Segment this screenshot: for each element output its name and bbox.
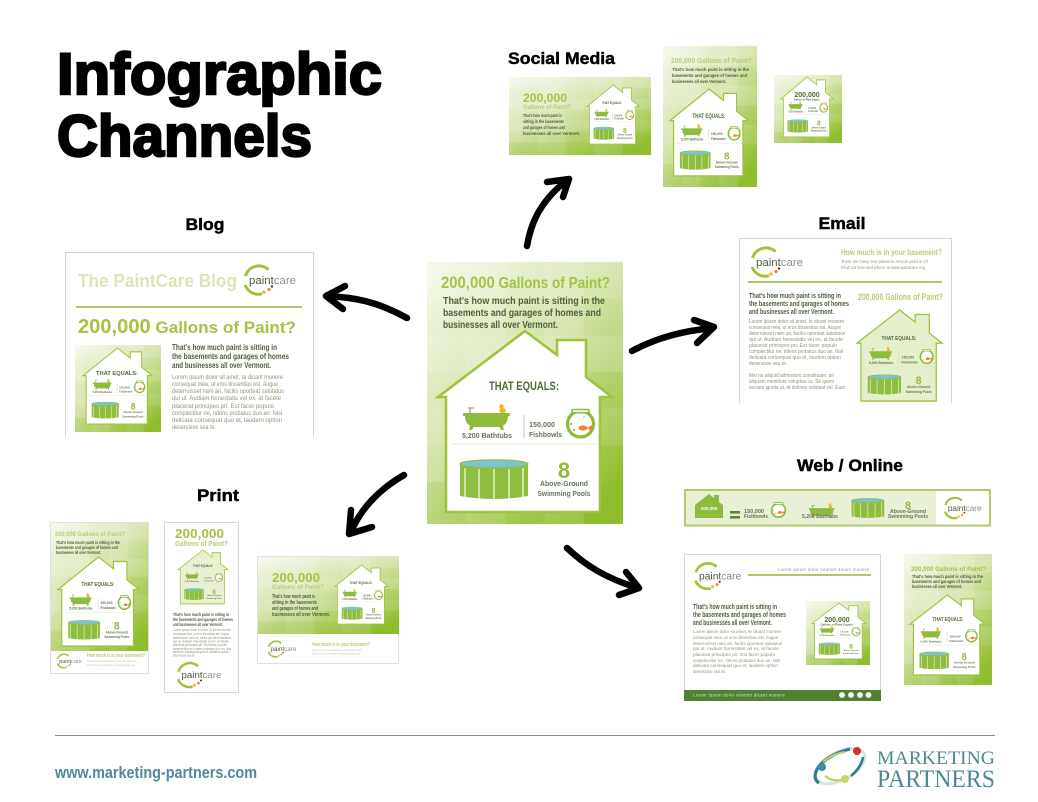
title: Infographic xyxy=(57,42,382,107)
panel: social media square: 200,000 xyxy=(794,92,820,99)
panel: web tall ad xyxy=(904,554,992,685)
panel: print rack card: That's how much paint is sitting in xyxy=(173,612,229,618)
title xyxy=(57,42,382,169)
panel: print rack card: Gallons of Paint? xyxy=(175,541,228,548)
panel: blog: the basements and garages of homes xyxy=(172,351,289,361)
panel: web page mockup: Lorem ipsum dolor sit amet, te dicant munere xyxy=(693,629,781,634)
panel: print rack card: 200,000 xyxy=(175,526,224,541)
heading: Email: Email xyxy=(818,214,866,233)
panel: email: deseruisse sea te. xyxy=(749,361,787,367)
panel: print rack card: the basements and garages of homes xyxy=(173,617,233,623)
panel: email: Mel no aliquid admodum constituam, pri xyxy=(749,373,834,379)
arrow: to social media xyxy=(527,179,569,246)
panel: web banner: 200,000 xyxy=(701,506,718,511)
panel: print postcard: How much is in your basement? xyxy=(312,642,370,648)
panel: web page mockup: and businesses all over Vermont. xyxy=(693,620,772,627)
panel: blog: consequat mea, ut eros dissentias est. Augue xyxy=(172,382,279,388)
panel: email: the basements and garages of homes xyxy=(749,299,849,308)
heading: Blog: Blog xyxy=(186,215,224,234)
panel: email: How much is in your basement? xyxy=(841,248,942,257)
panel: web tall ad: That's how much paint is sitting in the xyxy=(912,574,983,579)
panel: web tall ad: basements and garages of homes and xyxy=(912,579,981,584)
panel: print poster: businesses all over Vermont. xyxy=(56,550,101,556)
panel: central infographic: basements and garages of homes and xyxy=(443,308,601,319)
panel: web page mockup: deseruisse sea te. xyxy=(693,669,726,674)
panel: web banner: 150,000 xyxy=(744,509,764,515)
panel: print postcard: Find out how and where at www.paintcare.org xyxy=(312,652,360,656)
house graphic xyxy=(438,331,612,512)
panel: print poster xyxy=(50,522,148,674)
panel: blog: Lorem ipsum dolor sit amet, te dicant munere xyxy=(172,375,284,381)
panel: social media square: Gallons of Paint Equals: xyxy=(794,98,820,102)
panel: blog: That's how much paint is sitting in xyxy=(172,342,277,352)
panel: print rack card: placerat principes pri. Est facer populo xyxy=(173,643,227,647)
panel: print rack card: delicata consequat quo et, laudem option xyxy=(173,650,229,654)
panel: print postcard: businesses all over Vermont. xyxy=(272,612,331,618)
panel: web page mockup: complectitur ne, ridens probatus duo an. Nisl xyxy=(693,658,780,663)
panel: blog: THAT EQUALS: xyxy=(96,371,138,377)
panel: print postcard: sitting in the basements xyxy=(272,600,317,606)
panel: social media landscape: Gallons of Paint? xyxy=(523,105,571,111)
panel: email: aliquam menitture voluptua cu. Sit quem xyxy=(749,379,834,385)
panel: print postcard: There are many new places to recycle paint in VT. xyxy=(312,648,362,652)
panel: blog: deterruisset nam an, facilis oporteat salutatus xyxy=(172,389,284,395)
logo: blog xyxy=(245,266,296,294)
panel: central infographic: businesses all over Vermont. xyxy=(443,320,558,331)
panel: email: Lorem ipsum dolor sit amet, te dicant munere xyxy=(749,319,844,325)
panel: print rack card: and businesses all over Vermont. xyxy=(173,622,223,628)
panel: email xyxy=(740,238,952,403)
panel: web page mockup: Lorem ipsum dolor sitamet dicant munere xyxy=(778,567,870,572)
panel: web page mockup: Gallons of Paint Equals: xyxy=(820,622,854,626)
panel: web banner: 5,200 Bathtubs xyxy=(802,514,838,520)
panel: social media portrait: basements and garages of homes and xyxy=(672,73,747,79)
panel: web tall ad: 200,000 Gallons of Paint? xyxy=(911,566,986,573)
panel: blog: complectitur ne, ridens probatus duo an. Nisl xyxy=(172,411,282,417)
panel: web page mockup: deterruisset nam an, facilis oporteat salutatus xyxy=(693,641,783,646)
panel: social media portrait: 200,000 Gallons of Paint? xyxy=(671,58,752,65)
title: Channels xyxy=(57,104,312,169)
panel: print poster: That's how much paint is sitting in the xyxy=(56,540,120,546)
panel: blog: deseruisse sea te. xyxy=(172,425,216,431)
panel: email: qui ut. Audiam honestatis vel ex, at facete xyxy=(749,337,843,343)
panel: email: veniam ignota ut, et dolores volutpat vel. Eam xyxy=(749,385,845,391)
panel: blog: 200,000 Gallons of Paint? xyxy=(78,316,296,338)
panel: blog: delicata consequat quo et, laudem option xyxy=(172,418,282,424)
panel: print poster: 200,000 Gallons of Paint? xyxy=(55,531,125,538)
panel: web page mockup: That's how much paint is sitting in xyxy=(693,604,777,611)
panel: print poster: There are many new places to recycle paint in VT. xyxy=(87,659,137,663)
panel: print postcard: and garages of homes and xyxy=(272,606,318,612)
panel: social media portrait: That's how much paint is sitting in the xyxy=(672,67,749,73)
panel: email: and businesses all over Vermont. xyxy=(749,307,834,316)
panel: web banner: Fishbowls xyxy=(744,514,768,520)
panel: email: 200,000 Gallons of Paint? xyxy=(858,292,943,303)
panel: print poster: THAT EQUALS: xyxy=(82,582,115,588)
panel: email: consequat mea, ut eros dissentias est. Augue xyxy=(749,325,841,331)
panel: email: Find out how and where at www.paintcare.org xyxy=(841,265,925,270)
panel: blog: placerat principes pri. Est facer populo xyxy=(172,404,275,410)
panel: central infographic xyxy=(427,262,623,524)
panel: web page mockup: placerat principes pri. Est facer populo xyxy=(693,652,775,657)
footer url: www.marketing-partners.com xyxy=(54,763,257,782)
footer logo: Marketing Partners: PARTNERS xyxy=(877,766,995,793)
panel: social media landscape xyxy=(509,77,651,155)
panel: print rack card: THAT EQUALS: xyxy=(193,564,213,568)
panel: print rack card: complectitur ne, ridens probatus duo an. Nisl xyxy=(173,647,231,651)
panel: print poster: How much is in your basement? xyxy=(87,653,145,659)
panel: social media landscape: THAT EQUALS: xyxy=(602,100,622,105)
footer logo: Marketing Partners xyxy=(810,741,995,793)
panel: blog xyxy=(66,252,314,436)
panel: web banner: Swimming Pools xyxy=(888,514,928,520)
panel: web page mockup xyxy=(684,554,881,701)
panel: email: complectitur ne, ridens probatus duo an. Nisl xyxy=(749,349,843,355)
panel: web page mockup: delicata consequat quo et, laudem option xyxy=(693,663,778,668)
panel: web page mockup: 200,000 xyxy=(824,617,850,624)
panel: social media landscape: businesses all over Vermont. xyxy=(523,131,580,136)
arrow: to blog xyxy=(326,286,407,318)
arrow: to print xyxy=(349,475,404,534)
panel: email: That's how much paint is sitting in xyxy=(749,291,841,300)
panel: web page mockup: the basements and garages of homes xyxy=(693,612,786,619)
heading: Social Media: Social Media xyxy=(508,49,616,68)
panel: central infographic: THAT EQUALS: xyxy=(489,379,559,393)
panel: print rack card: Lorem ipsum dolor sit amet, te dicant munere xyxy=(173,628,231,632)
panel: email: THAT EQUALS: xyxy=(882,336,917,342)
panel: blog: qui ut. Audiam honestatis vel ex, at facete xyxy=(172,396,282,402)
panel: print rack card xyxy=(164,522,238,692)
panel: social media portrait xyxy=(663,46,757,187)
panel: social media square xyxy=(774,75,842,143)
panel: social media landscape: and garages of homes and xyxy=(523,125,565,130)
heading: Print: Print xyxy=(197,486,239,505)
panel: print postcard: 200,000 xyxy=(272,570,320,585)
panel: print poster: Find out how and where at www.paintcare.org xyxy=(87,663,135,667)
panel: print poster: basements and garages of homes and xyxy=(56,545,118,551)
panel: web banner xyxy=(685,490,990,526)
panel: web tall ad: THAT EQUALS: xyxy=(932,617,964,623)
panel: print rack card: deterruisset nam an, facilis oporteat salutatus xyxy=(173,636,231,640)
panel: email: deterruisset nam an, facilis oporteat salutatus xyxy=(749,331,845,337)
panel: email: placerat principes pri. Est facer populo xyxy=(749,343,837,349)
panel: web banner: 8 xyxy=(905,500,911,512)
panel: central infographic: 200,000 Gallons of Paint? xyxy=(441,273,610,292)
panel: email: There are many new places to recycle paint in VT. xyxy=(841,259,929,264)
panel: print postcard: That's how much paint is xyxy=(272,594,315,600)
panel: social media landscape: sitting in the basements xyxy=(523,119,564,124)
panel: email: delicata consequat quo et, laudem option xyxy=(749,355,841,361)
panel: social media portrait: THAT EQUALS: xyxy=(692,114,726,120)
panel: web page mockup: consequat mea, ut eros dissentias est. Augue xyxy=(693,635,778,640)
panel: web page mockup: Lorem Ipsum dolor sitamet dicant munere xyxy=(693,692,786,698)
footer logo: Marketing Partners: MARKETING xyxy=(877,748,995,769)
panel: web banner: Above-Ground xyxy=(890,509,926,515)
panel: web tall ad: businesses all over Vermont. xyxy=(912,584,962,589)
panel: print postcard: Gallons of Paint? xyxy=(272,584,324,591)
panel: print postcard xyxy=(258,556,399,664)
panel: social media landscape: 200,000 xyxy=(523,91,567,105)
panel: print rack card: qui ut. Audiam honestatis vel ex, at facete xyxy=(173,640,229,644)
panel: central infographic: That's how much paint is sitting in the xyxy=(443,296,605,307)
panel: social media landscape: That's how much paint is xyxy=(523,113,562,118)
panel: social media portrait: businesses all over Vermont. xyxy=(672,79,726,85)
logo: email xyxy=(752,248,803,276)
arrow: to web xyxy=(567,548,639,595)
panel: web page mockup: qui ut. Audiam honestatis vel ex, at facete xyxy=(693,646,779,651)
panel: print rack card: deseruisse sea te. xyxy=(173,654,195,658)
panel: print rack card: consequat mea, ut eros dissentias est. Augue xyxy=(173,632,229,636)
panel: blog: and businesses all over Vermont. xyxy=(172,360,271,370)
panel: print postcard: THAT EQUALS: xyxy=(350,581,372,585)
arrow: to email xyxy=(632,320,714,351)
panel: blog: The PaintCare Blog xyxy=(78,271,237,291)
heading: Web / Online: Web / Online xyxy=(797,456,903,475)
